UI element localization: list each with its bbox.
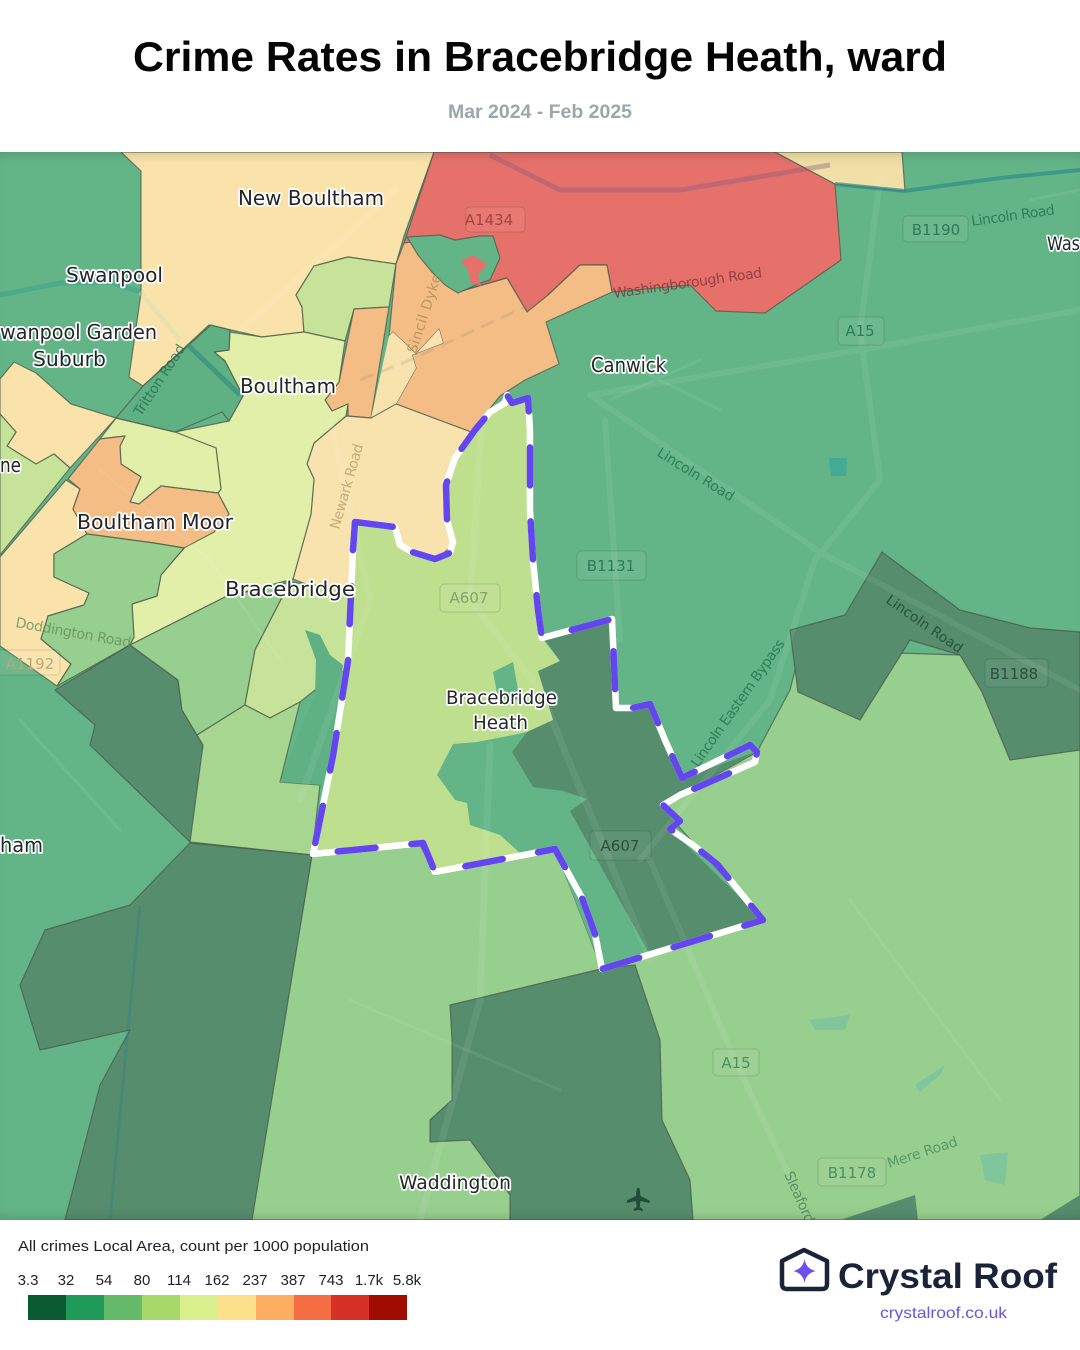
region: top right cream strip [775,152,905,191]
region: light green Bracebridge west [130,582,290,735]
region: cream north-west [121,152,434,386]
road number badges: B1190 [912,221,960,239]
place labels: Boultham [240,374,336,398]
region: green enclave [407,235,500,293]
icon: airfield plane [627,1188,650,1211]
ward fill: green estate [437,732,596,952]
region: red enclave [461,255,487,286]
road name labels: Doddington Road [14,615,132,651]
road number badges: A15 [721,1054,751,1072]
place labels: Suburb [33,347,106,371]
road name labels: Mere Road [885,1134,960,1172]
logo: Crystal Roof [782,1250,1057,1322]
legend values: 54 [96,1272,112,1289]
place labels: Swanpool [66,263,163,287]
place labels [0,186,1080,1194]
region: pale lime north of Boultham Moor [100,418,221,504]
road number badges: B1131 [587,557,635,575]
region: cream wedge by Sincil Dyke [371,329,443,418]
icon: house with sparkle [782,1250,827,1289]
region: dark green Waddington [430,965,693,1220]
region: lime Bracebridge south [245,582,355,718]
region: dark green bottom right [840,1195,1080,1220]
region: red Lincoln city [404,152,841,313]
region: cream west [0,362,116,468]
place labels: Waddington [399,1172,511,1194]
region: Tritton green [116,325,243,432]
road number badges: A607 [601,837,639,855]
place labels: Boultham Moor [77,510,234,534]
road name labels: Sincil Dyke [405,272,445,355]
place labels: Canwick [591,353,666,377]
ward fill: dark green [512,619,763,955]
place labels: Bracebridge [225,577,355,601]
place labels: wanpool Garden [0,320,157,344]
region: orange city south [389,241,612,432]
legend values [18,1272,422,1289]
legend values: 5.8k [393,1272,422,1289]
road name labels: Lincoln Eastern Bypass [688,637,788,770]
ward fill: lime [313,395,560,872]
legend [18,1239,422,1320]
place labels: New Boultham [238,186,384,210]
region: light green Boultham north [296,257,396,341]
road number badges: A607 [450,589,488,607]
legend values: 1.7k [355,1272,384,1289]
region: pale lime Boultham [130,332,348,645]
legend values: 743 [318,1272,344,1289]
road name labels: Washingborough Road [612,265,763,302]
legend values: 80 [134,1272,150,1289]
place labels: Bracebridge [446,687,557,709]
ward fill: small green patch [493,662,520,700]
region: right light green fields [250,640,1080,1220]
region: dark green Hartsholme [55,645,203,842]
road name labels: Tritton Road [130,342,189,420]
legend values: 162 [204,1272,230,1289]
region: dark green north-east [790,552,1080,760]
road name labels [14,202,1056,1260]
road number badges: B1188 [990,665,1038,683]
region: top strip cream [575,152,645,163]
legend values: 114 [167,1272,191,1289]
ward boundary: white line with purple dashes [313,395,763,969]
legend title: All crimes Local Area, count per 1000 population [18,1239,369,1255]
place labels: ne [0,453,21,477]
region: light green south of Bracebridge [190,702,320,855]
road name labels: Newark Road [327,442,367,531]
road number badges: A1192 [6,655,54,673]
road name labels: Lincoln Road [883,592,966,657]
subtitle: date range: Mar 2024 - Feb 2025 [448,102,632,123]
region: lime west [0,414,70,555]
road name labels: Sleaford Road [780,1169,832,1260]
region: orange Boultham Moor [68,436,229,548]
road number badges: A1434 [465,211,513,229]
legend values: 237 [242,1272,268,1289]
wordmark: Crystal Roof [838,1257,1057,1296]
region: orange Boultham strip [325,307,389,418]
website url: crystalroof.co.uk [880,1305,1008,1322]
road number badges: A15 [845,322,875,340]
legend colour scale [28,1295,407,1320]
title: Crime Rates in Bracebridge Heath, ward [133,33,947,80]
legend values: 32 [58,1272,74,1289]
road number badges [0,207,1048,1186]
road name labels: Lincoln Road [654,445,737,505]
legend values: 3.3 [18,1272,38,1289]
place labels: ham [0,833,43,857]
road number badges: B1178 [828,1164,876,1182]
region: cream Bracebridge north [293,404,471,602]
legend values: 387 [280,1272,306,1289]
roads and paths [0,155,1080,1220]
place labels: Heath [473,712,528,734]
region: dark green south-west [20,843,312,1220]
road name labels: Lincoln Road [970,202,1056,230]
region: green riverside enclave [280,630,343,785]
region: light green Doddington [41,534,184,686]
region: cream south-west [0,480,89,686]
